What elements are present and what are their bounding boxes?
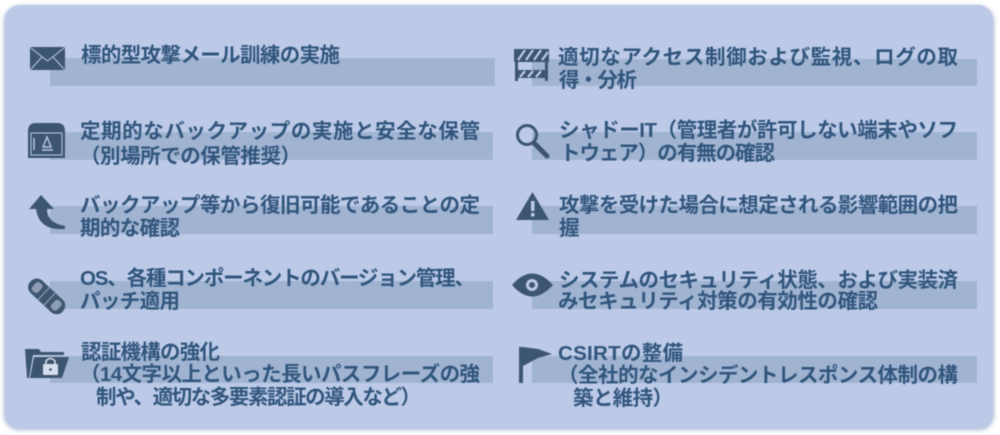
icon: warning triangle <box>516 192 549 220</box>
icon: return arrow <box>29 195 65 229</box>
text: version management: OS、各種コンポーネントのバージョン管理、 <box>80 266 475 290</box>
item: access control <box>514 45 977 92</box>
item: CSIRT: 築と維持） <box>573 387 673 410</box>
icon: eye <box>512 274 553 296</box>
item: version management <box>25 266 493 318</box>
icon: magnifier <box>518 126 547 156</box>
text: shadow IT: シャドーIT（管理者が許可しない端末やソフ <box>559 118 958 142</box>
text: CSIRT: CSIRTの整備 <box>558 342 683 365</box>
item: access control: 得・分析 <box>559 69 637 92</box>
icon: locked folder <box>25 349 69 378</box>
item: authentication <box>25 341 493 409</box>
item: version management: パッチ適用 <box>80 290 180 313</box>
item: authentication: 制や、適切な多要素認証の導入など） <box>96 385 421 409</box>
text: impact scope: 攻撃を受けた場合に想定される影響範囲の把 <box>559 194 958 217</box>
icon: safe box <box>28 123 65 158</box>
item: impact scope: 握 <box>559 217 580 240</box>
text: backups: 定期的なバックアップの実施と安全な保管 <box>80 120 480 143</box>
item: system security: みセキュリティ対策の有効性の確認 <box>558 290 878 313</box>
icon: flag <box>519 347 552 383</box>
text: restore test: バックアップ等から復旧可能であることの定 <box>80 194 480 217</box>
text: authentication: 認証機構の強化 <box>81 341 220 364</box>
icon: bandage <box>25 275 69 318</box>
item: CSIRT <box>519 342 977 410</box>
item: backups: （別場所での保管推奨） <box>80 145 301 168</box>
item: backups <box>28 120 493 168</box>
text: system security: システムのセキュリティ状態、および実装済 <box>559 269 958 292</box>
item: authentication: （14文字以上といった長いパスフレーズの強 <box>80 362 480 386</box>
item: impact scope <box>516 192 977 240</box>
item: shadow IT: トウェア）の有無の確認 <box>560 142 776 165</box>
icon: barricade <box>514 49 549 81</box>
item: shadow IT <box>518 118 977 165</box>
text: access control: 適切なアクセス制御および監視、ログの取 <box>558 45 958 69</box>
item: CSIRT: （全社的なインシデントレスポンス体制の構 <box>558 363 958 387</box>
item: restore test <box>29 194 493 240</box>
item: system security <box>512 269 977 313</box>
icon: envelope <box>30 47 65 70</box>
item: restore test: 期的な確認 <box>80 217 180 240</box>
item: targeted mail training <box>30 44 495 86</box>
text: targeted mail training: 標的型攻撃メール訓練の実施 <box>81 44 340 67</box>
